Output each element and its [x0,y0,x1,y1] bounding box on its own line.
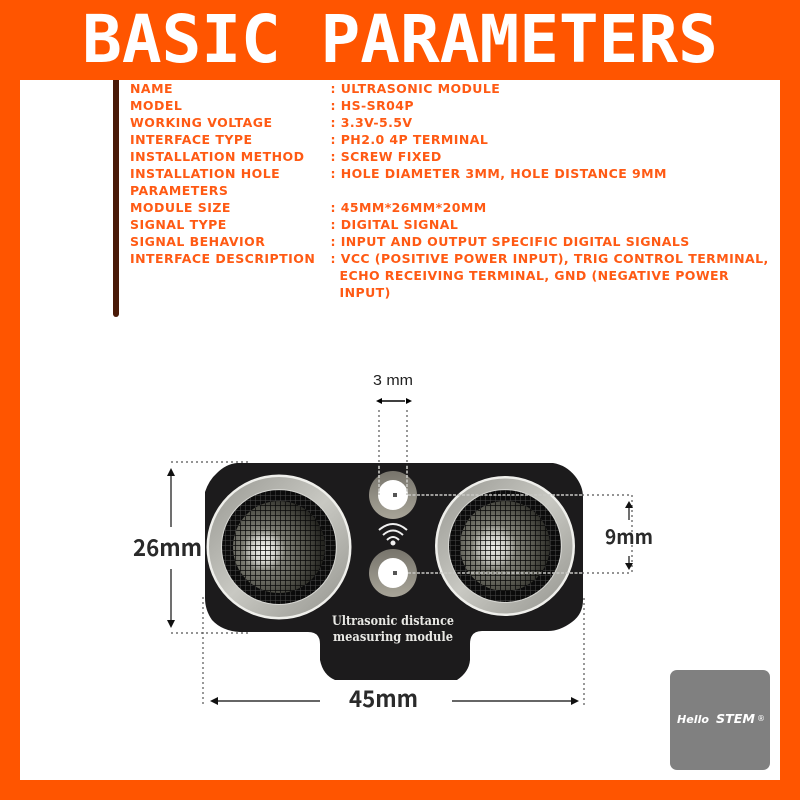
parameter table: SIGNAL TYPE [130,217,227,232]
board label [332,614,454,645]
title: BASIC PARAMETERS [82,1,718,78]
parameter table: : HOLE DIAMETER 3MM, HOLE DISTANCE 9MM [330,166,667,181]
parameter table: SIGNAL BEHAVIOR [130,234,265,249]
parameter table: : 45MM*26MM*20MM [330,200,487,215]
icon: wifi waves [379,524,407,544]
board label: measuring module [333,630,453,645]
dimension: 3 mm [373,372,413,404]
logo badge [670,670,770,770]
top mounting hole [369,471,417,519]
parameter table: MODEL [130,98,182,113]
dimension: 26mm: 26mm [133,529,202,563]
parameter table: INTERFACE DESCRIPTION [130,251,315,266]
logo text: Hello [677,713,709,726]
parameter table: : 3.3V-5.5V [330,115,412,130]
dimension guide lines [171,410,632,706]
parameter table: NAME [130,81,173,96]
parameter table: : DIGITAL SIGNAL [330,217,458,232]
parameter table: : ULTRASONIC MODULE [330,81,500,96]
logo text: ® [757,714,765,723]
bottom mounting hole [369,549,417,597]
dimension: 9mm [605,501,653,570]
parameter table: : PH2.0 4P TERMINAL [330,132,488,147]
dimension: 26mm [133,468,202,628]
parameter table: PARAMETERS [130,183,228,198]
board label: Ultrasonic distance [332,614,454,629]
parameter table: INSTALLATION HOLE [130,166,280,181]
circuit board [205,463,583,680]
left ultrasonic sensor [206,474,352,620]
logo text: STEM [716,712,755,726]
parameter table [130,81,769,300]
logo text [677,712,765,726]
dimension: 45mm [210,680,579,714]
dimension: 9mm: 9mm [605,521,653,550]
parameter table: INTERFACE TYPE [130,132,253,147]
dimension: 3 mm: 3 mm [373,372,413,389]
parameter table: : INPUT AND OUTPUT SPECIFIC DIGITAL SIGNALS [330,234,690,249]
dotted overlay on board [379,466,582,573]
parameter table: MODULE SIZE [130,200,231,215]
right ultrasonic sensor [435,476,575,616]
parameter table: INSTALLATION METHOD [130,149,304,164]
parameter table: : VCC (POSITIVE POWER INPUT), TRIG CONTROL TERMINAL, [330,251,769,266]
parameter table: WORKING VOLTAGE [130,115,273,130]
parameter table: ECHO RECEIVING TERMINAL, GND (NEGATIVE POWER [340,268,729,283]
parameter table: : SCREW FIXED [330,149,442,164]
dimension: 45mm: 45mm [349,680,418,714]
parameter table: : HS-SR04P [330,98,414,113]
vertical bar [113,80,119,317]
parameter table: INPUT) [340,285,391,300]
